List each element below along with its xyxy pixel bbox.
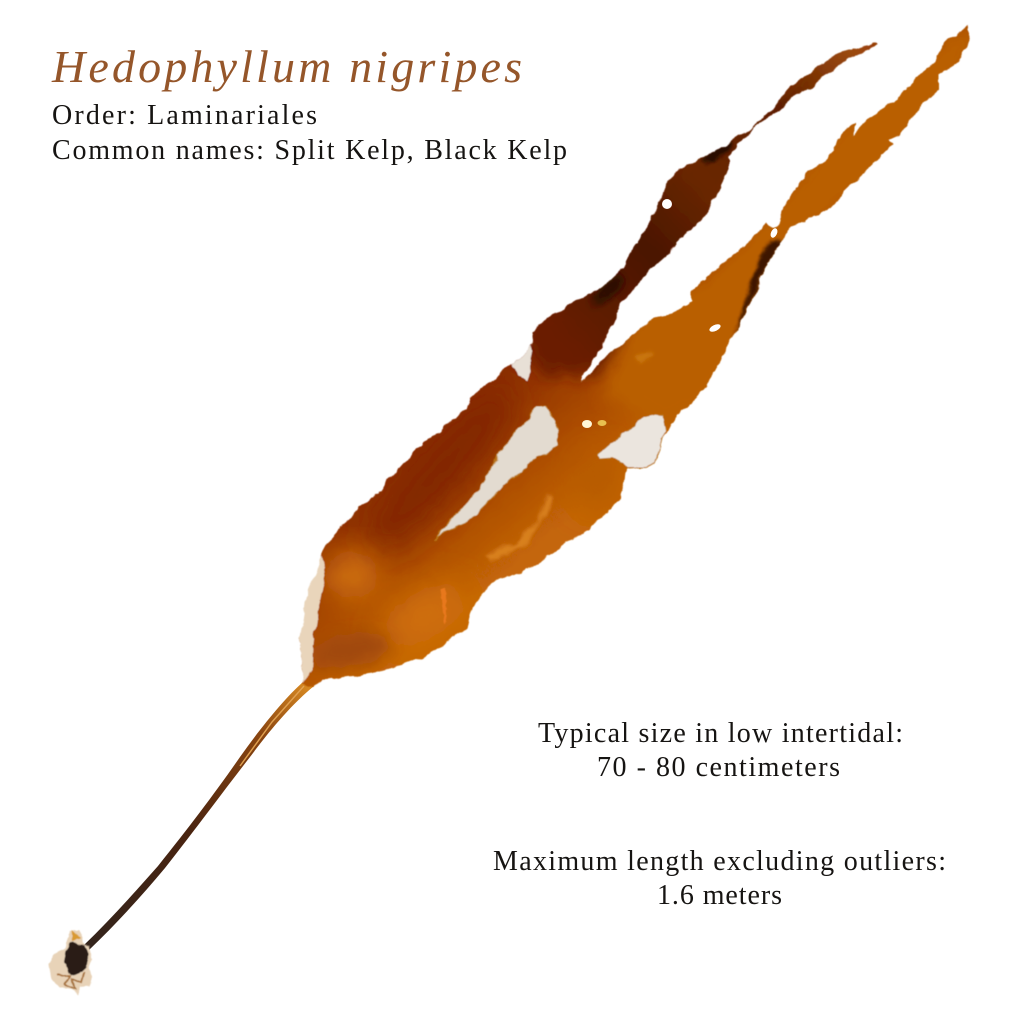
text: typical size: Typical size in low intertidal: <box>538 718 903 749</box>
pale torn patches <box>300 345 665 682</box>
text: maximum length: 1.6 meters <box>657 880 782 911</box>
dark bands on upper left strap <box>588 271 628 309</box>
blade <box>280 15 990 700</box>
dark edge at right strap pinch <box>732 240 782 342</box>
text: maximum length <box>493 846 946 911</box>
blade shading <box>361 396 524 558</box>
streak marks <box>486 495 552 562</box>
text: typical size <box>538 718 903 783</box>
text: maximum length: Maximum length excluding outliers: <box>493 846 946 877</box>
holdfast <box>50 930 92 996</box>
title: Hedophyllum nigripes <box>51 41 522 92</box>
stipe <box>84 682 314 950</box>
text: typical size: 70 - 80 centimeters <box>597 752 840 783</box>
text: order: Order: Laminariales <box>52 100 317 131</box>
stipe highlight <box>240 686 304 766</box>
small holes <box>582 199 779 428</box>
right strap <box>600 15 980 430</box>
text: common names: Common names: Split Kelp, Black Kelp <box>52 135 567 166</box>
upper left strap <box>515 40 885 375</box>
